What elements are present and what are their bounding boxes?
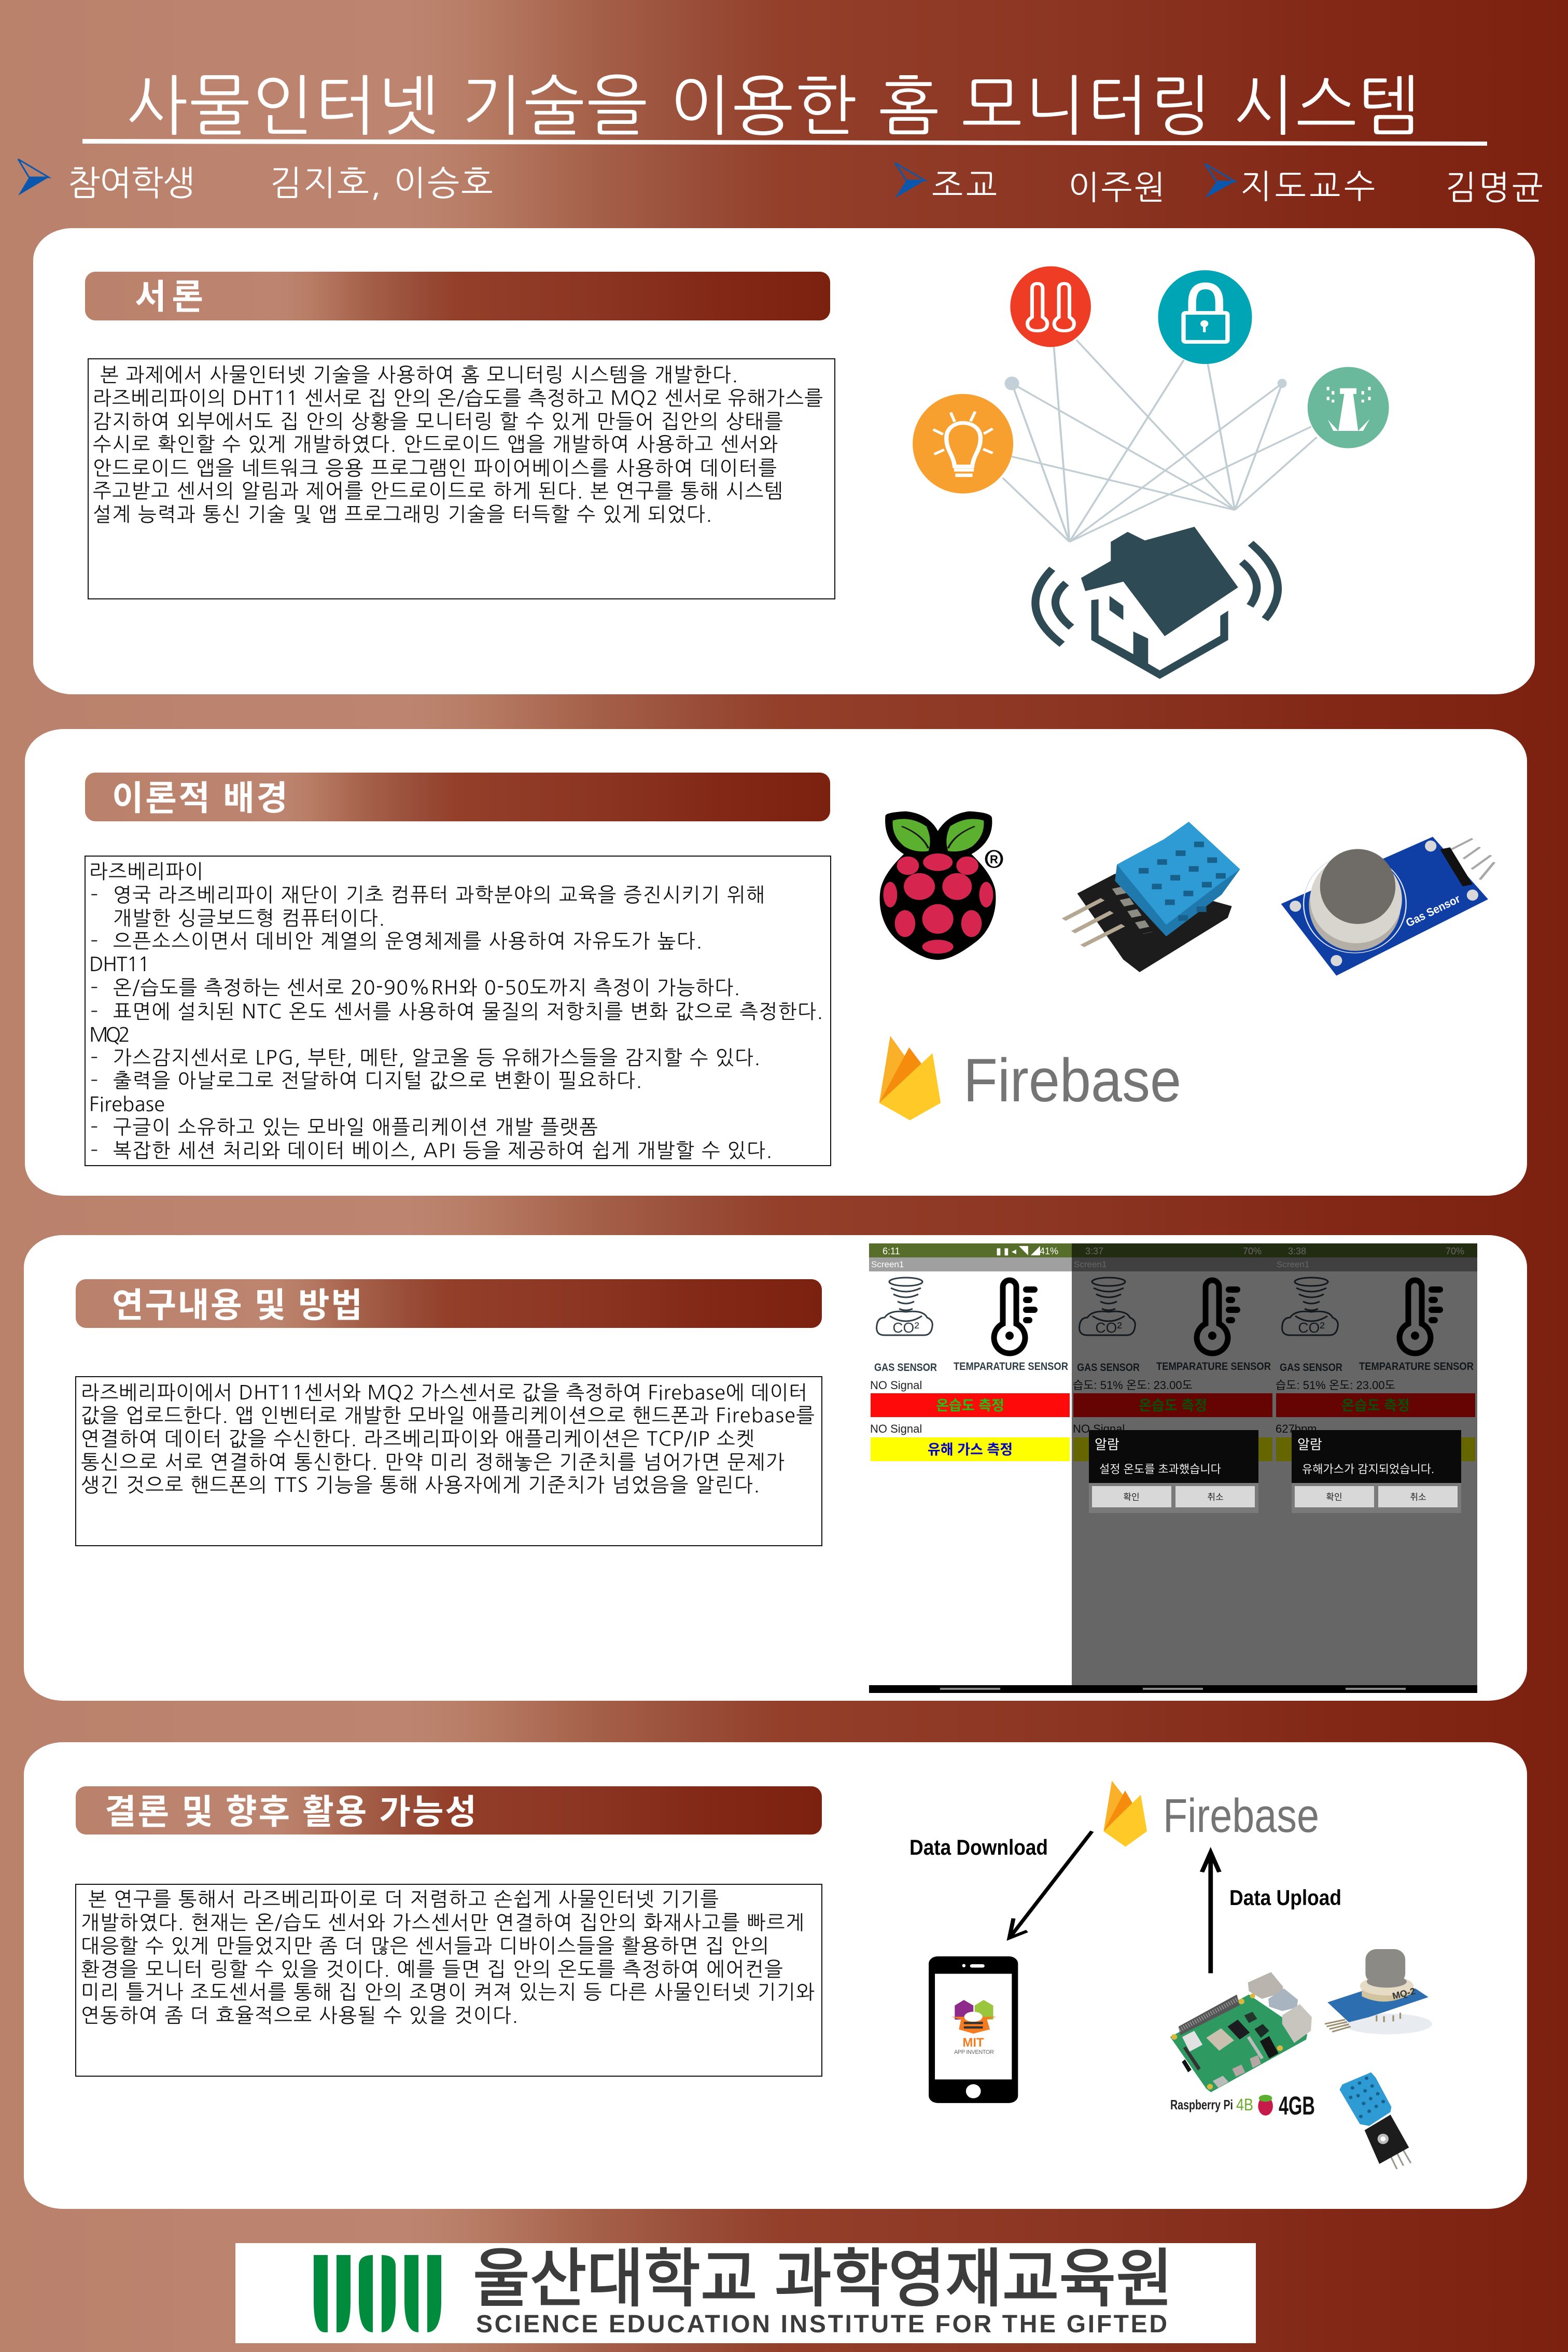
text block: conclusion: 대응할 수 있게 만들었지만 좀 더 많은 센서들과 디바이스들을 활용하면 집 안의 (81, 1936, 769, 1956)
panel: theoretical background (25, 729, 1527, 1196)
text block: background: 표면에 설치된 NTC 온도 센서를 사용하여 물질의 저항치를 변화 값으로 측정한다. (113, 1002, 823, 1021)
text block: background: 라즈베리파이 (89, 862, 203, 881)
app screenshot: normal screen: 41% (1040, 1246, 1058, 1256)
icon: arrow bullet (18, 159, 49, 195)
image: Raspberry Pi 4B board: 4B (1236, 2095, 1253, 2114)
students (68, 166, 493, 200)
image: Raspberry Pi 4B board: Raspberry Pi (1170, 2097, 1233, 2112)
text block: background: 온/습도를 측정하는 센서로 20-90%RH와 0-50도까지 측정이 가능하다. (113, 978, 740, 998)
app screenshot: gas alert: Screen1 (1277, 1259, 1309, 1269)
students: 김지호, 이승호 (270, 166, 493, 200)
app screenshot: normal screen: CO² (892, 1320, 919, 1336)
icon: smartphone with MIT App Inventor: APP INVENTOR (954, 2049, 994, 2055)
app screenshot: gas alert: 3:38 (1288, 1246, 1306, 1256)
heading: 서론: 서론 (135, 269, 203, 319)
icon: light bulb (913, 394, 1013, 494)
text block: method: 값을 업로드한다. 앱 인벤터로 개발한 모바일 애플리케이션으로 핸드폰과 Firebase를 (81, 1406, 815, 1425)
students: 참여학생 (68, 166, 195, 200)
logo: Firebase (1103, 1781, 1319, 1847)
app screenshot: temperature alert: 유해 가스 측정 (1130, 1438, 1215, 1459)
app screenshot: temperature alert: 온습도 측정 (1139, 1394, 1207, 1415)
text block: background: 개발한 싱글보드형 컴퓨터이다. (113, 908, 385, 928)
text block: method: 통신으로 서로 연결하여 통신한다. 만약 미리 정해놓은 기준치를 넘어가면 문제가 (81, 1452, 785, 1472)
text block: introduction: 감지하여 외부에서도 집 안의 상황을 모니터링 할 수 있게 만들어 집안의 상태를 (93, 412, 783, 431)
panel: introduction (33, 228, 1535, 694)
app screenshot: gas alert: 유해가스가 감지되었습니다. (1302, 1463, 1434, 1476)
text block: introduction (88, 359, 835, 599)
icon: raspberry pi logo (880, 811, 1002, 960)
assistant: 조교 (932, 169, 997, 202)
institute english name: SCIENCE EDUCATION INSTITUTE FOR THE GIFTED (476, 2311, 1167, 2338)
icon: arrow bullet (895, 163, 925, 198)
text block: introduction: 수시로 확인할 수 있게 개발하였다. 안드로이드 앱을 개발하여 사용하고 센서와 (93, 435, 778, 454)
text block: background: 영국 라즈베리파이 재단이 기초 컴퓨터 과학분야의 교육을 증진시키기 위해 (113, 885, 765, 905)
logo: university institute banner (235, 2243, 1256, 2343)
text block: background: Firebase (89, 1095, 165, 1114)
app screenshot: gas alert: 70% (1446, 1246, 1464, 1256)
app screenshot: gas alert: 유해 가스 측정 (1333, 1438, 1418, 1459)
app screenshot: gas alert: TEMPARATURE SENSOR (1359, 1361, 1474, 1373)
label: data download: Data Download (909, 1835, 1048, 1859)
text block: conclusion: 환경을 모니터 링할 수 있을 것이다. 예를 들면 집 안의 온도를 측정하여 에어컨을 (81, 1959, 783, 1979)
app screenshot: temperature alert: TEMPARATURE SENSOR (1156, 1361, 1271, 1373)
app screenshot: normal screen: TEMPARATURE SENSOR (954, 1361, 1068, 1373)
app screenshot: temperature alert: 취소 (1207, 1492, 1224, 1502)
icon: green bars emblem (314, 2255, 441, 2332)
app screenshot: gas alert: 확인 (1326, 1492, 1342, 1502)
diagram: data flow (909, 1781, 1432, 2169)
panel: research content and method (24, 1235, 1527, 1701)
image: Raspberry Pi 4B board (1170, 1972, 1315, 2120)
app screenshot: normal screen: Screen1 (871, 1259, 904, 1269)
icon: smartphone with MIT App Inventor (929, 1956, 1018, 2103)
text block: background: DHT11 (89, 955, 150, 974)
app screenshot: normal screen: NO Signal (870, 1422, 922, 1435)
image: MQ2 gas sensor: Gas Sensor (1404, 892, 1462, 929)
image: DHT11 sensor (1063, 822, 1240, 972)
app screenshot: normal screen: 유해 가스 측정 (928, 1438, 1013, 1459)
app screenshot: gas alert: 취소 (1410, 1492, 1426, 1502)
text block: method (76, 1377, 822, 1546)
text block: conclusion (76, 1884, 822, 2076)
app screenshot: temperature alert: 70% (1243, 1246, 1262, 1256)
app screenshot: temperature alert: CO² (1095, 1320, 1122, 1336)
text block: background (85, 856, 831, 1166)
image: MQ gas sensor (1325, 1949, 1432, 2034)
text block: introduction: 설계 능력과 통신 기술 및 앱 프로그래밍 기술을 터득할 수 있게 되었다. (93, 505, 712, 524)
heading: 이론적 배경 (85, 771, 830, 821)
assistant (932, 169, 1165, 204)
app screenshot: temperature alert: GAS SENSOR (1077, 1362, 1140, 1374)
app screenshot: temperature alert: NO Signal (1073, 1422, 1125, 1435)
text block: background: 으픈소스이면서 데비안 계열의 운영체제를 사용하여 자유도가 높다. (113, 931, 702, 951)
heading: 결론 및 향후 활용 가능성 (76, 1784, 822, 1835)
app screenshot: normal screen: ▮ ▮ ◂ ◥ ◢ (996, 1246, 1040, 1256)
text block: introduction: 라즈베리파이의 DHT11 센서로 집 안의 온/습도를 측정하고 MQ2 센서로 유해가스를 (93, 388, 823, 408)
app screenshot: temperature alert: 3:37 (1085, 1246, 1103, 1256)
icon: house (1035, 527, 1278, 679)
arrow: data upload (1202, 1852, 1220, 1973)
label: data upload: Data Upload (1229, 1885, 1341, 1910)
text block: conclusion: 본 연구를 통해서 라즈베리파이로 더 저렴하고 손쉽게 사물인터넷 기기를 (88, 1889, 719, 1909)
app screenshot: normal screen: 6:11 (883, 1246, 900, 1256)
text block: method: 라즈베리파이에서 DHT11센서와 MQ2 가스센서로 값을 측정하여 Firebase에 데이터 (81, 1383, 807, 1403)
text block: background: 구글이 소유하고 있는 모바일 애플리케이션 개발 플랫폼 (113, 1117, 598, 1137)
app screenshot: gas alert: 습도: 51% 온도: 23.00도 (1276, 1379, 1395, 1392)
app screenshot: temperature alert: 습도: 51% 온도: 23.00도 (1073, 1379, 1193, 1392)
app screenshot: temperature alert: 설정 온도를 초과했습니다 (1099, 1463, 1221, 1476)
text block: method: 생긴 것으로 핸드폰의 TTS 기능을 통해 사용자에게 기준치가 넘었음을 알린다. (81, 1475, 760, 1495)
text block: background: – (90, 978, 99, 998)
app screenshot: gas alert: GAS SENSOR (1280, 1362, 1342, 1374)
icon: padlock (1158, 270, 1252, 364)
text block: method: 연결하여 데이터 값을 수신한다. 라즈베리파이와 애플리케이션은 TCP/IP 소켓 (81, 1429, 754, 1449)
participants row (18, 159, 1543, 204)
image: DHT11 sensor (1339, 2073, 1411, 2169)
app screenshot: gas alert: CO² (1298, 1320, 1325, 1336)
app screenshot: normal screen: NO Signal (870, 1379, 922, 1392)
text block: background: 출력을 아날로그로 전달하여 디지털 값으로 변환이 필요하다. (113, 1071, 642, 1090)
app screenshot: temperature alert: 알람 (1095, 1437, 1119, 1452)
image: Raspberry Pi 4B board: 4GB (1279, 2091, 1315, 2120)
heading: 결론 및 향후 활용 가능성: 결론 및 향후 활용 가능성 (105, 1784, 477, 1834)
logo: Firebase: Firebase (963, 1046, 1181, 1115)
heading: 연구내용 및 방법: 연구내용 및 방법 (112, 1278, 362, 1327)
illustration: smart home network (913, 266, 1389, 679)
arrow: data download (1010, 1831, 1092, 1938)
text block: conclusion: 미리 틀거나 조도센서를 통해 집 안의 조명이 켜져 있는지 등 다른 사물인터넷 기기와 (81, 1982, 815, 2002)
app screenshot: gas alert: 알람 (1297, 1437, 1322, 1452)
assistant: 이주원 (1068, 171, 1165, 204)
app screenshot: temperature alert: 확인 (1123, 1492, 1140, 1502)
panel: conclusion (24, 1742, 1527, 2209)
text block: background: 복잡한 세션 처리와 데이터 베이스, API 등을 제공하여 쉽게 개발할 수 있다. (113, 1141, 772, 1160)
text block: background: – (90, 931, 99, 951)
text block: introduction: 안드로이드 앱을 네트워크 응용 프로그램인 파이어베이스를 사용하여 데이터를 (93, 458, 777, 478)
app screenshot: temperature alert (1072, 1243, 1275, 1693)
text block: conclusion: 개발하였다. 현재는 온/습도 센서와 가스센서만 연결하여 집안의 화재사고를 빠르게 (81, 1913, 804, 1933)
text block: background: – (90, 1141, 99, 1160)
heading: 연구내용 및 방법 (76, 1278, 822, 1328)
image: MQ gas sensor: MQ-2 (1391, 1986, 1417, 2001)
professor (1240, 170, 1543, 204)
app screenshot: normal screen: GAS SENSOR (874, 1362, 937, 1374)
icon: smartphone with MIT App Inventor: MIT (962, 2036, 984, 2050)
text block: background: – (90, 1117, 99, 1137)
professor: 김명균 (1445, 171, 1543, 204)
heading: 서론 (85, 269, 830, 320)
professor: 지도교수 (1240, 170, 1375, 203)
text block: background: – (90, 1048, 99, 1068)
text block: background: – (90, 885, 99, 905)
text block: background: – (90, 1002, 99, 1021)
institute name: 울산대학교 과학영재교육원 (473, 2244, 1173, 2314)
app screenshot: temperature alert: Screen1 (1074, 1259, 1107, 1269)
logo: Firebase (879, 1036, 1181, 1121)
text block: introduction: 본 과제에서 사물인터넷 기술을 사용하여 홈 모니터링 시스템을 개발한다. (100, 365, 738, 385)
text block: background: – (90, 1071, 99, 1090)
app screenshot: gas alert: 627bpm (1276, 1422, 1317, 1435)
logo: Firebase: Firebase (1163, 1789, 1319, 1842)
title: 사물인터넷 기술을 이용한 홈 모니터링 시스템 (127, 73, 1420, 138)
icon: thermometers (1010, 266, 1091, 347)
icon: raspberry pi logo: R (990, 853, 998, 866)
image: MQ2 gas sensor (1281, 837, 1494, 976)
app screenshot: normal screen (869, 1243, 1072, 1693)
app screenshot: normal screen: 온습도 측정 (936, 1394, 1004, 1415)
app screenshot: gas alert (1275, 1243, 1477, 1693)
app screenshot: gas alert: 온습도 측정 (1341, 1394, 1410, 1415)
text block: background: MQ2 (89, 1025, 130, 1045)
icon: sprinkler (1308, 367, 1389, 448)
text block: background: 가스감지센서로 LPG, 부탄, 메탄, 알코올 등 유해가스들을 감지할 수 있다. (113, 1048, 760, 1068)
heading: 이론적 배경: 이론적 배경 (112, 771, 288, 820)
icon: arrow bullet (1205, 164, 1235, 198)
text block: conclusion: 연동하여 좀 더 효율적으로 사용될 수 있을 것이다. (81, 2006, 518, 2025)
text block: introduction: 주고받고 센서의 알림과 제어를 안드로이드로 하게 된다. 본 연구를 통해 시스템 (93, 481, 783, 501)
